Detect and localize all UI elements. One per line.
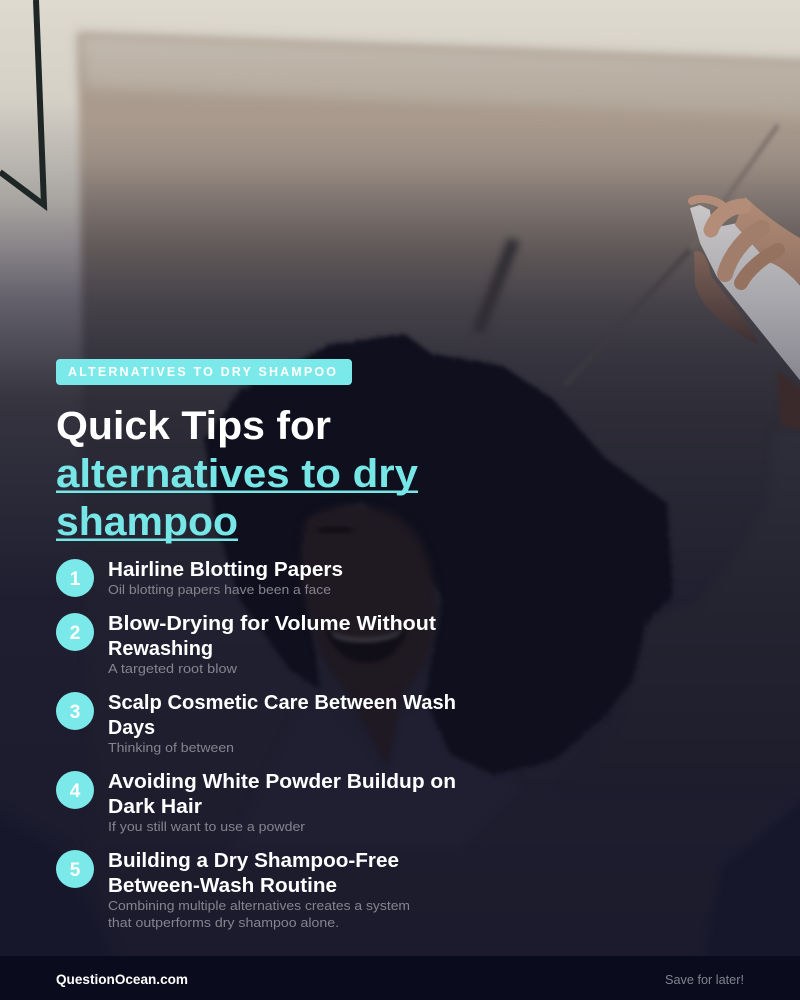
tip 2 description: A targeted root blow [108,661,238,676]
title [56,404,419,544]
tip 3 description: Thinking of between [108,740,234,755]
footer bar [0,956,800,1000]
title: alternatives to dry [56,452,419,496]
category badge: ALTERNATIVES TO DRY SHAMPOO [68,365,336,379]
number badge 1: 1 [70,569,81,590]
number badge 2 [56,613,94,651]
tip 5 [56,850,410,930]
tip 5 description: that outperforms dry shampoo alone. [108,915,339,930]
number badge 3 [56,692,94,730]
tip 5 description: Combining multiple alternatives creates a system [108,898,410,913]
tip 3 heading [108,692,456,739]
tip 5 heading: Building a Dry Shampoo-Free [108,850,399,872]
number badge 4 [56,771,94,809]
tip 5 heading: Between-Wash Routine [108,875,337,897]
number badge 1 [56,559,94,597]
title: shampoo [56,500,238,544]
tip 5 description [108,898,410,930]
tip 2 heading: Blow-Drying for Volume Without [108,613,436,635]
tip 1 [56,559,343,597]
tip 3 heading: Scalp Cosmetic Care Between Wash [108,692,456,714]
tip 3 heading: Days [108,717,155,739]
number badge 5 [56,850,94,888]
footer brand: QuestionOcean.com [56,971,188,987]
tip 4 [56,771,456,834]
tip 2 heading: Rewashing [108,638,213,660]
number badge 2: 2 [70,623,80,644]
tip 5 heading [108,850,399,897]
title: Quick Tips for [56,404,331,448]
number badge 5: 5 [70,860,81,881]
tip 4 heading: Avoiding White Powder Buildup on [108,771,456,793]
tip 4 description: If you still want to use a powder [108,819,306,834]
number badge 3: 3 [70,702,80,723]
tip 1 description: Oil blotting papers have been a face [108,582,331,597]
tip 2 [56,613,436,676]
category badge [56,359,352,385]
tip 1 heading: Hairline Blotting Papers [108,559,343,581]
tip 2 heading [108,613,436,660]
tip 4 heading [108,771,456,818]
footer save note: Save for later! [665,972,744,987]
tip 3 [56,692,456,755]
tip 4 heading: Dark Hair [108,796,202,818]
number badge 4: 4 [70,781,81,802]
